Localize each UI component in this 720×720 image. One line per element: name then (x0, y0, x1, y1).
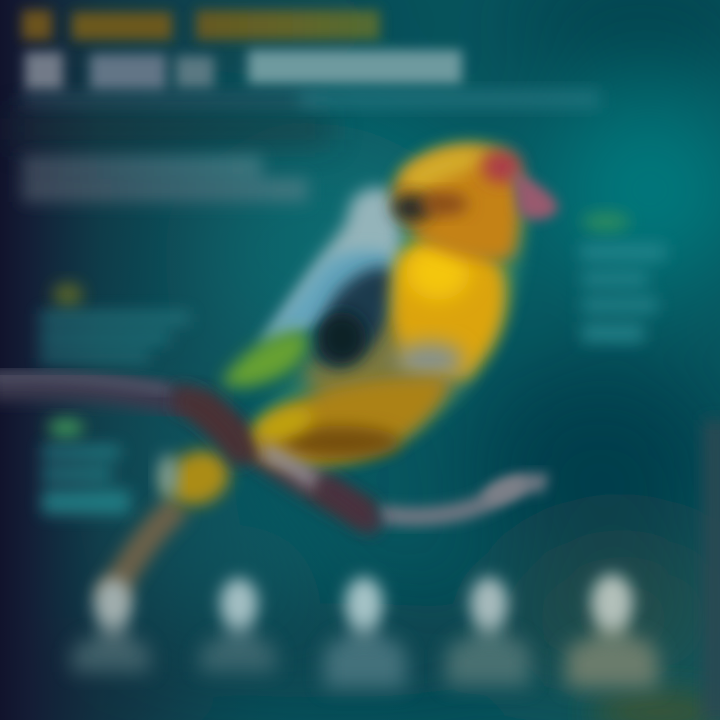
title: yellow heading line (22, 10, 380, 40)
callout 1 icon (53, 283, 83, 307)
bird: outer glow outline (250, 140, 527, 467)
bird: red crown and beak (482, 151, 558, 220)
bird: back and blue wing (258, 188, 402, 366)
species 2 (200, 578, 276, 672)
right callout (580, 212, 666, 342)
bird: breast (391, 239, 506, 378)
species 1 (72, 578, 150, 672)
title: white heading line (25, 50, 462, 90)
branch overlap (175, 398, 378, 528)
species row (72, 574, 658, 688)
species 5 (566, 574, 658, 688)
intro text block (22, 156, 308, 202)
branch (0, 376, 546, 518)
right callout icon (582, 212, 630, 232)
species 4 (446, 577, 530, 686)
species 3 (324, 577, 406, 688)
bird: green wing tip (222, 332, 308, 387)
left callout 1 (40, 283, 190, 362)
bird: head (392, 147, 520, 262)
bird: grey belly patch (396, 342, 464, 378)
bird: mid body olive (300, 300, 470, 420)
bird: legs (262, 450, 318, 484)
bird (108, 140, 558, 600)
subtitle strip (22, 90, 600, 108)
bird: tail (108, 441, 238, 600)
callout 2 text (42, 446, 130, 514)
callout 1 text (40, 312, 190, 362)
right callout text (580, 244, 666, 342)
bird: lower body (250, 378, 446, 465)
callout 2 icon (48, 418, 84, 438)
left callout 2 (42, 418, 130, 514)
